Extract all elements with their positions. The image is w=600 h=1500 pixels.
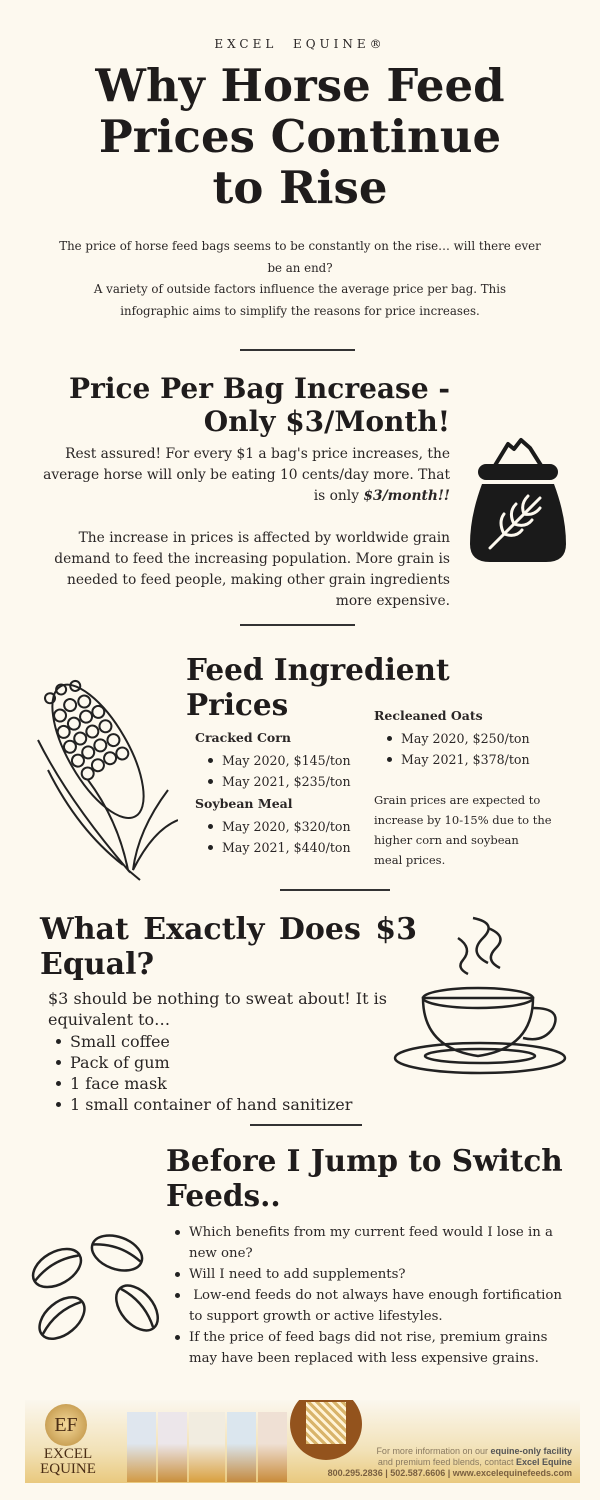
list: corn and soybean: May 2021, $440/ton [222,840,351,855]
logo [45,1404,87,1446]
heading: what does $3 equal: What Exactly Does $3 [40,912,417,947]
contact text [328,1446,572,1478]
list: considerations: Which benefits from my current feed would I lose in a [189,1225,553,1240]
text: $3 equals list: Small coffee [70,1032,170,1051]
footer banner: EXCEL [44,1446,92,1462]
text: $3 equals list: equivalent to… [48,1010,170,1029]
list: corn and soybean: May 2020, $320/ton [222,819,351,834]
logo: EF [54,1414,78,1436]
heading: price per bag: Only $3/Month! [204,405,450,438]
list: oats and note: increase by 10-15% due to the [374,813,552,827]
list: considerations: may have been replaced with less expensive grains. [189,1351,539,1366]
text: $3 equals list: 1 face mask [70,1074,167,1093]
footer banner [25,1400,580,1483]
list: considerations: new one? [189,1246,253,1261]
list: considerations: Low-end feeds do not always have enough fortification [193,1288,562,1303]
list: oats and note: May 2020, $250/ton [401,731,530,746]
title: to Rise [213,161,387,214]
text: price per bag: needed to feed people, making other grain ingredients [67,572,450,588]
list: oats and note: Grain prices are expected to [374,793,540,807]
icon: corn [37,680,178,881]
title: Why Horse Feed [95,59,505,112]
footer banner: EQUINE [40,1461,96,1477]
text: $3 equals list: $3 should be nothing to sweat about! It is [48,989,387,1008]
text: $3 equals list: 1 small container of hand sanitizer [70,1095,352,1114]
list: corn and soybean: Soybean Meal [195,796,292,811]
product bags [127,1412,287,1482]
list: considerations: If the price of feed bags did not rise, premium grains [189,1330,547,1345]
list: oats and note: May 2021, $378/ton [401,752,530,767]
list: corn and soybean: May 2021, $235/ton [222,774,351,789]
heading: what does $3 equal [40,912,417,982]
contact text: For more information on our equine-only facility [376,1446,572,1456]
text: price per bag: The increase in prices is affected by worldwide grain [79,530,450,546]
text: $3 equals list: Pack of gum [70,1053,170,1072]
contact text: and premium feed blends, contact Excel Equine [378,1457,572,1467]
heading: feed ingredient prices: Prices [186,687,288,722]
heading: before switching: Before I Jump to Switch [166,1143,563,1178]
heading: before switching [166,1143,563,1213]
list: considerations [175,1225,562,1366]
contact text: 800.295.2836 | 502.587.6606 | www.excelequinefeeds.com [328,1468,572,1478]
title: Prices Continue [99,110,501,163]
list: oats and note [374,708,552,867]
intro text: The price of horse feed bags seems to be constantly on the rise… will there ever [59,239,541,253]
text: price per bag: more expensive. [336,593,450,609]
heading: feed ingredient prices: Feed Ingredient [186,652,450,687]
heading: before switching: Feeds.. [166,1178,281,1213]
list: corn and soybean: Cracked Corn [195,730,291,745]
text: price per bag: demand to feed the increasing population. More grain is [54,551,450,567]
heading: feed ingredient prices [186,652,450,722]
intro text: A variety of outside factors influence the average price per bag. This [94,282,506,296]
text: price per bag: average horse will only be eating 10 cents/day more. That [43,467,450,483]
icon: coffee beans / seeds [32,1234,159,1340]
intro text: infographic aims to simplify the reasons for price increases. [120,304,480,318]
text: price per bag [43,446,450,609]
icon: coffee cup [394,916,566,1074]
intro text [59,239,541,318]
list: oats and note: Recleaned Oats [374,708,483,723]
list: considerations: Will I need to add supplements? [189,1267,406,1282]
list: oats and note: higher corn and soybean [374,833,519,847]
list: considerations: to support growth or active lifestyles. [189,1309,443,1324]
text: $3 equals list [48,989,387,1114]
list: corn and soybean [195,730,351,855]
text: price per bag: Rest assured! For every $1 a bag's price increases, the [65,446,450,462]
heading: price per bag [69,372,450,438]
heading: price per bag: Price Per Bag Increase - [69,372,450,405]
text: price per bag: is only $3/month!! [314,488,450,504]
icon: feed bag [470,438,566,562]
QR code circle [290,1388,362,1460]
intro text: be an end? [267,260,333,274]
brand: EXCEL EQUINE® [214,37,386,51]
list: corn and soybean: May 2020, $145/ton [222,753,351,768]
title [94,59,505,214]
heading: what does $3 equal: Equal? [40,947,154,982]
list: oats and note: meal prices. [374,853,445,867]
